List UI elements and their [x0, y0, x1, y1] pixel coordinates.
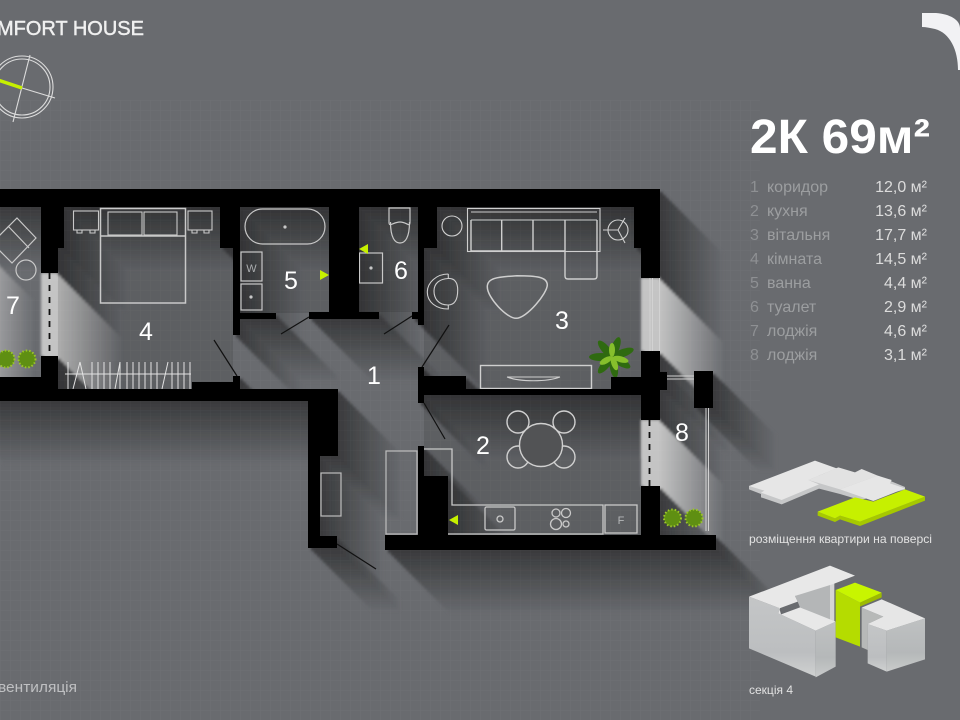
- furniture: bathroom: [241, 209, 325, 310]
- row 7: 7: [750, 323, 759, 340]
- room numbers: 8: [675, 419, 689, 447]
- row 4: кімната: [767, 251, 822, 268]
- cast shadows and window light: [0, 192, 779, 613]
- row 6: 2,9 м²: [884, 299, 928, 316]
- furniture: bedroom: [74, 208, 212, 303]
- row 5: 5: [750, 275, 759, 292]
- row 1: 12,0 м²: [875, 179, 928, 196]
- row 3: 17,7 м²: [875, 227, 928, 244]
- row 1: коридор: [767, 179, 828, 196]
- row 6: туалет: [767, 299, 817, 316]
- row 8: 3,1 м²: [884, 347, 928, 364]
- room numbers: 2: [476, 432, 490, 460]
- row 2: 13,6 м²: [875, 203, 928, 220]
- wardrobe hangers: [65, 362, 191, 389]
- moss planters: loggia 8: [664, 510, 702, 526]
- logo corner mark: [922, 13, 960, 70]
- ventilation legend: вентиляція: [0, 679, 77, 696]
- row 5: ванна: [767, 275, 811, 292]
- row 8: 8: [750, 347, 759, 364]
- area table: [750, 179, 928, 364]
- door leaves: [214, 316, 449, 569]
- row 1: [750, 179, 928, 196]
- row 7: 4,6 м²: [884, 323, 928, 340]
- washer label: W: [246, 263, 257, 275]
- row 6: [750, 299, 928, 316]
- row 3: [750, 227, 928, 244]
- window frames: [50, 273, 708, 531]
- floor location caption: розміщення квартири на поверсі: [749, 532, 932, 546]
- row 8: лоджія: [767, 347, 817, 364]
- floor grid: [0, 100, 760, 720]
- plant: living room: [589, 336, 635, 378]
- furniture: dining table and chairs: [507, 411, 575, 468]
- row 2: [750, 203, 928, 220]
- row 4: 14,5 м²: [875, 251, 928, 268]
- row 3: 3: [750, 227, 759, 244]
- room numbers: 4: [139, 318, 153, 346]
- row 3: вітальня: [767, 227, 830, 244]
- row 2: 2: [750, 203, 759, 220]
- room numbers: 6: [394, 257, 408, 285]
- compass: [0, 55, 55, 122]
- room numbers: 3: [555, 307, 569, 335]
- row 2: кухня: [767, 203, 808, 220]
- kitchen units: [424, 449, 637, 534]
- section caption: секція 4: [749, 683, 793, 697]
- furniture: room 7 loggia: [0, 218, 36, 280]
- row 5: [750, 275, 928, 292]
- row 7: лоджія: [767, 323, 817, 340]
- ventilation markers: [320, 244, 458, 525]
- apartment heading: 2К 69м²: [750, 111, 930, 164]
- room numbers: [6, 257, 689, 460]
- row 8: [750, 347, 928, 364]
- row 1: 1: [750, 179, 759, 196]
- floor location diagram: [749, 461, 925, 526]
- room numbers: 1: [367, 362, 381, 390]
- row 4: [750, 251, 928, 268]
- walls: [0, 189, 716, 550]
- row 7: [750, 323, 928, 340]
- fridge label: F: [618, 515, 625, 527]
- furniture: toilet room: [360, 208, 410, 283]
- moss planters: loggia 7: [0, 350, 36, 368]
- section diagram: [749, 566, 925, 677]
- row 4: 4: [750, 251, 759, 268]
- room numbers: 5: [284, 267, 298, 295]
- room floors: [58, 207, 641, 535]
- row 5: 4,4 м²: [884, 275, 928, 292]
- hallway wardrobes: [321, 451, 417, 534]
- sofa and living room furniture: [427, 208, 628, 388]
- room numbers: 7: [6, 292, 20, 320]
- row 6: 6: [750, 299, 759, 316]
